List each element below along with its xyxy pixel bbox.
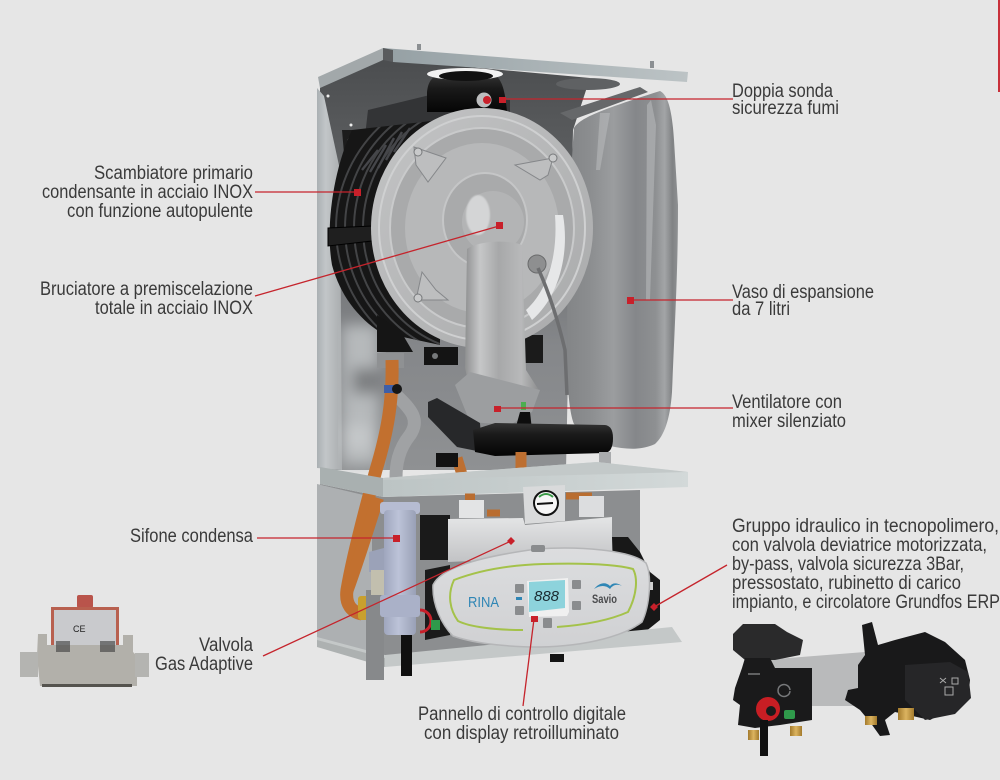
grey return pipe xyxy=(396,395,414,478)
lower compartment background xyxy=(317,484,640,665)
disc center ring xyxy=(443,173,527,267)
label: Pannello di controllo: con display retroilluminato xyxy=(424,723,619,744)
pipe clip xyxy=(384,384,402,394)
label: Pannello di controllo xyxy=(418,704,626,744)
green tap xyxy=(784,710,795,719)
flue opening on top plate xyxy=(556,78,620,90)
left brass xyxy=(748,726,802,740)
pump head xyxy=(905,662,971,720)
valve label text: CE xyxy=(73,624,86,634)
fan duct xyxy=(465,242,540,398)
tap icon xyxy=(516,597,522,600)
label: Doppia sonda: Doppia sonda xyxy=(732,81,833,102)
LCD digits: 888 xyxy=(534,588,560,605)
flue collar black xyxy=(427,75,507,112)
copper connectors top xyxy=(465,496,592,513)
panel clip xyxy=(531,545,545,552)
flue opening inner xyxy=(439,71,493,81)
coil top fins xyxy=(362,128,410,172)
copper pipe main xyxy=(347,360,392,614)
valve label xyxy=(54,610,116,647)
panel green outline xyxy=(450,564,636,630)
exchanger bracket xyxy=(342,130,363,200)
white casing xyxy=(448,496,612,562)
hydraulic group illustration xyxy=(733,622,971,756)
back panel xyxy=(320,58,590,470)
expansion vessel xyxy=(567,91,678,449)
label: Scambiatore primario: con funzione autopulente xyxy=(67,201,253,222)
valve red body xyxy=(51,607,119,649)
exchanger cover black xyxy=(364,95,510,180)
fan mixer xyxy=(428,372,613,478)
flue opening white ring xyxy=(427,68,503,80)
heat exchanger plate xyxy=(763,652,865,706)
copper pipe lower xyxy=(347,498,378,614)
disc bolts xyxy=(414,148,557,302)
label: Scambiatore primario xyxy=(42,163,253,222)
label: Vaso di espansione: da 7 litri xyxy=(732,299,790,320)
label: Bruciatore: Bruciatore a premiscelazione xyxy=(40,279,253,300)
pressure gauge xyxy=(523,485,565,524)
exchanger lower outlet xyxy=(377,315,458,368)
top plate xyxy=(383,48,688,82)
label: Vaso di espansione: Vaso di espansione xyxy=(732,282,874,303)
label: Doppia sonda: sicurezza fumi xyxy=(732,98,839,119)
label: Scambiatore primario: condensante in acciaio INOX xyxy=(42,182,253,203)
copper stubs xyxy=(457,452,521,478)
bracket screw xyxy=(348,136,356,146)
valve left thread xyxy=(20,652,38,677)
base plate xyxy=(317,627,682,667)
valve metal body xyxy=(37,634,137,686)
black parts behind siphon xyxy=(420,515,450,560)
right black clip xyxy=(525,335,543,363)
label: Valvola Gas Adaptive xyxy=(155,635,253,675)
label: Gruppo idraulico: pressostato, rubinetto di carico xyxy=(732,573,961,594)
hydraulic group dark xyxy=(420,565,450,640)
top plate left slope xyxy=(318,48,383,88)
smoke probe xyxy=(476,92,492,108)
elbow highlight xyxy=(466,195,490,235)
label: Scambiatore primario: Scambiatore primario xyxy=(94,163,253,184)
heat exchanger coils xyxy=(328,121,440,345)
mounting pins xyxy=(419,44,652,68)
label: Gruppo idraulico: by-pass, valvola sicurezza 3Bar, xyxy=(732,554,964,575)
pump faceplate marks xyxy=(940,678,958,695)
gas valve illustration xyxy=(20,595,149,687)
mixer black tube xyxy=(473,423,613,456)
disc recessed ring xyxy=(390,128,574,328)
panel buttons xyxy=(515,580,581,628)
label: Bruciatore: totale in acciaio INOX xyxy=(95,298,253,319)
label: Valvola Gas Adaptive: Valvola xyxy=(199,635,253,656)
label: Ventilatore: mixer silenziato xyxy=(732,411,846,432)
disc brackets xyxy=(414,147,553,300)
left wall xyxy=(317,88,342,470)
Savio logo text: Savio xyxy=(592,592,617,606)
manifold highlight xyxy=(748,674,790,696)
exchanger strap xyxy=(328,226,372,246)
coil ribs xyxy=(335,122,440,345)
display bezel xyxy=(527,578,569,617)
label: Pannello di controllo: Pannello di controllo digitale xyxy=(418,704,626,725)
vessel bracket xyxy=(560,87,648,120)
corner accent xyxy=(998,0,1000,92)
label: Vaso di espansione xyxy=(732,282,874,320)
Savio logo wave xyxy=(594,583,622,589)
left actuator xyxy=(733,624,803,660)
circulator pump xyxy=(612,537,660,638)
middle shelf xyxy=(320,462,688,497)
valve body shadow xyxy=(42,684,132,687)
valve red knob xyxy=(77,595,93,608)
label: Ventilatore: Ventilatore con xyxy=(732,392,842,413)
boiler illustration xyxy=(317,44,688,680)
handle hole xyxy=(766,706,776,716)
right brass xyxy=(865,708,914,725)
corner notch xyxy=(383,48,393,62)
label: Doppia sonda xyxy=(732,81,839,119)
valve right thread xyxy=(135,653,149,677)
burner disc xyxy=(371,108,593,348)
burner pipe elbow xyxy=(462,191,524,253)
drain pipes xyxy=(366,590,564,680)
condensate siphon xyxy=(369,502,420,635)
LCD display xyxy=(529,580,565,612)
label: Valvola Gas Adaptive: Gas Adaptive xyxy=(155,654,253,675)
control panel xyxy=(433,545,649,647)
vessel highlights xyxy=(596,100,656,300)
lower left wall reflections xyxy=(342,325,382,465)
callout leader lines xyxy=(255,99,733,706)
brass nut xyxy=(358,596,371,620)
callout markers xyxy=(354,97,658,622)
right manifold xyxy=(845,622,970,736)
valve coil connectors xyxy=(56,641,115,652)
disc inner plate xyxy=(405,143,559,313)
ignition cable xyxy=(528,255,567,395)
label: Gruppo idraulico xyxy=(732,516,1000,613)
disc highlight right xyxy=(526,215,565,320)
left manifold black xyxy=(733,658,812,728)
label: Ventilatore xyxy=(732,392,846,432)
RINA logo: RINA xyxy=(468,594,499,611)
red handle xyxy=(756,697,780,721)
label: Bruciatore xyxy=(40,279,253,319)
drain stem xyxy=(760,720,768,756)
gas fitting xyxy=(599,452,611,470)
panel screw dots xyxy=(326,94,352,126)
label: Sifone condensa: Sifone condensa xyxy=(130,526,253,547)
